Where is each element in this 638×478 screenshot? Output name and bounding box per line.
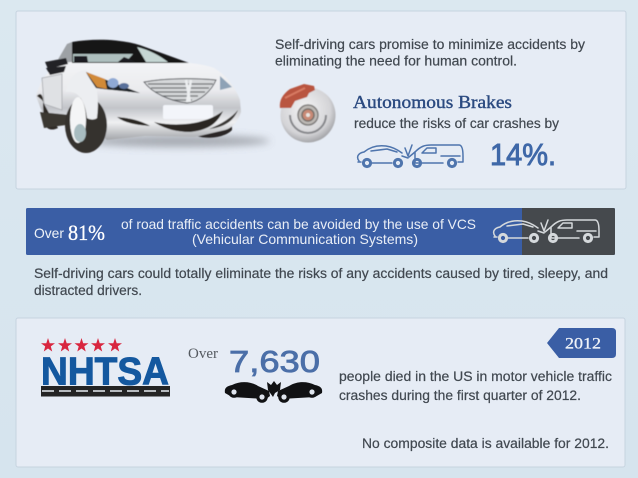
- stat: over 7,630: Over: [188, 346, 218, 362]
- stat: over 7,630: [188, 344, 320, 379]
- text: tired drivers: distracted drivers.: [34, 283, 142, 298]
- icon: brake disc: [280, 84, 336, 142]
- panel: autonomous brakes: [16, 11, 626, 189]
- banner dark end: [522, 208, 615, 255]
- icon: black crash cars: [225, 381, 322, 403]
- text: tired drivers: Self-driving cars could totally eliminate the risks of any accidents caused by tired, sleepy, and: [34, 266, 608, 281]
- intro text: Self-driving cars promise to minimize accidents by: [275, 37, 585, 52]
- intro text: eliminating the need for human control.: [275, 54, 517, 68]
- tag: 2012: [547, 328, 616, 358]
- icon: banner crash outline: [494, 220, 599, 242]
- banner text: of road traffic accidents can be avoided by the use of VCS: [121, 216, 476, 232]
- car illustration: [36, 40, 270, 153]
- icon: blue crash outline: [358, 145, 463, 167]
- banner stat: 81%: [68, 220, 105, 245]
- text: no composite data: No composite data is available for 2012.: [362, 436, 609, 451]
- banner: VCS: [26, 208, 615, 255]
- stat: over 7,630: 7,630: [229, 344, 320, 379]
- panel: NHTSA statistics: [16, 318, 625, 467]
- tag: 2012: 2012: [565, 336, 601, 352]
- text: deaths: crashes during the first quarter of 2012.: [339, 388, 581, 403]
- intro text: [275, 37, 585, 68]
- banner text: (Vehicular Communication Systems): [192, 231, 418, 247]
- banner text: [121, 216, 476, 247]
- banner stat: Over: [34, 225, 64, 241]
- logo: NHTSA: NHTSA: [41, 350, 169, 394]
- banner stat: [34, 220, 105, 245]
- text: deaths: people died in the US in motor vehicle traffic: [339, 369, 612, 384]
- text: reduce risks: reduce the risks of car crashes by: [354, 116, 559, 131]
- text: tired drivers: [34, 266, 608, 298]
- text: deaths: [339, 369, 612, 403]
- heading: autonomous brakes: Autonomous Brakes: [353, 92, 512, 112]
- stat: 14 percent: 14%.: [490, 137, 556, 172]
